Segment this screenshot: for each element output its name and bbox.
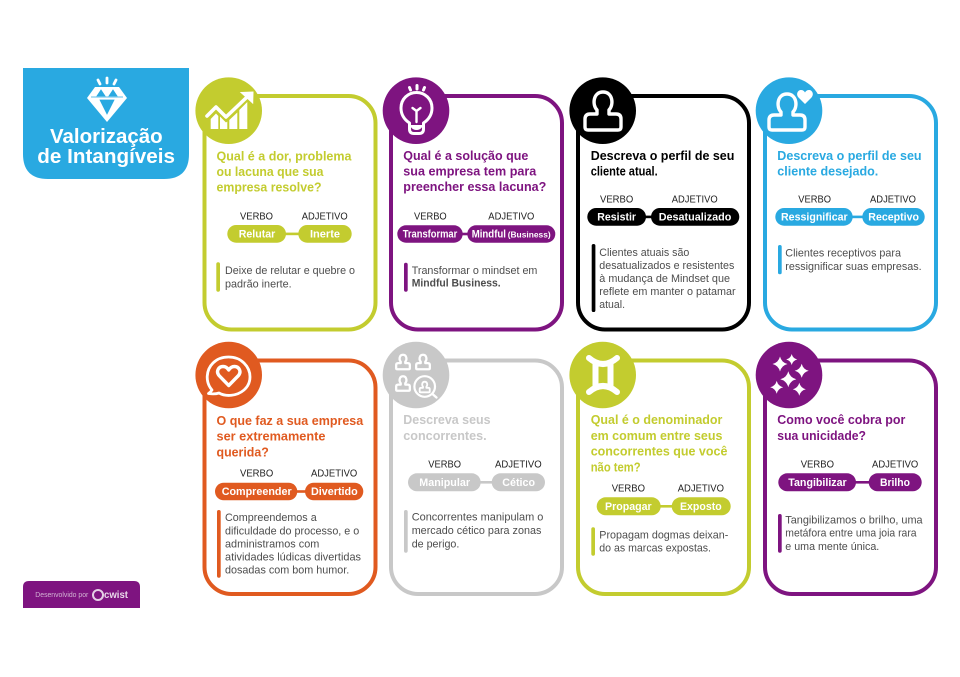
verb and adjective pills: Transformar — [403, 229, 458, 241]
description: do as marcas expostas. — [599, 543, 711, 555]
verb and adjective pills: VERBO — [801, 459, 834, 470]
heading: ser extremamente — [216, 429, 326, 444]
heading — [591, 148, 734, 178]
verb and adjective pills — [227, 211, 352, 243]
description: atual. — [599, 299, 625, 311]
verb and adjective pills: Exposto — [680, 501, 722, 513]
verb and adjective pills: ADJETIVO — [870, 194, 916, 205]
description: Mindful Business. — [412, 278, 501, 290]
verb and adjective pills: VERBO — [414, 211, 447, 222]
heading: Descreva seus — [403, 412, 491, 427]
heading: O que faz a sua empresa — [216, 413, 364, 428]
icon: heart in speech bubble — [207, 357, 250, 395]
verb and adjective pills: Cético — [502, 477, 535, 489]
verb and adjective pills: Mindful — [472, 229, 506, 241]
heading: querida? — [216, 445, 269, 460]
description — [404, 510, 543, 553]
verb and adjective pills: ADJETIVO — [672, 194, 718, 205]
heading: sua unicidade? — [777, 428, 866, 443]
heading: preencher essa lacuna? — [403, 179, 546, 194]
verb and adjective pills: VERBO — [798, 194, 831, 205]
icon: person with heart — [769, 90, 813, 130]
panel: footer credit — [23, 581, 140, 608]
heading: sua empresa tem para — [403, 164, 537, 178]
verb and adjective pills: ADJETIVO — [302, 211, 348, 222]
description: dificuldade do processo, e o — [225, 525, 359, 537]
icon: rising chart — [207, 92, 253, 129]
verb and adjective pills: Receptivo — [868, 211, 919, 223]
heading: concorrentes que você — [591, 444, 727, 459]
description: Clientes atuais são — [599, 247, 689, 259]
verb and adjective pills: ADJETIVO — [872, 459, 919, 470]
heading: ou lacuna que sua — [216, 164, 324, 179]
description: dosadas com bom humor. — [225, 565, 349, 577]
heading: cliente atual. — [591, 163, 658, 178]
verb and adjective pills: VERBO — [240, 469, 274, 480]
heading — [403, 412, 491, 443]
description — [778, 514, 923, 553]
verb and adjective pills: ADJETIVO — [488, 211, 534, 222]
description: metáfora entre uma joia rara — [785, 528, 917, 540]
heading: concorrentes. — [403, 428, 487, 443]
verb and adjective pills: Relutar — [239, 228, 276, 240]
panel: empresa querida — [195, 342, 376, 594]
description: de perigo. — [412, 538, 459, 550]
title: de Intangíveis — [37, 146, 175, 168]
description: Clientes receptivos para — [785, 248, 902, 260]
description: mercado cético para zonas — [412, 525, 542, 537]
description — [591, 527, 729, 556]
verb and adjective pills — [215, 469, 363, 500]
verb and adjective pills: Compreender — [222, 486, 292, 498]
panel: solução — [383, 77, 562, 330]
description — [404, 263, 537, 292]
panel: cliente atual — [569, 77, 749, 330]
description — [778, 245, 922, 274]
description: Concorrentes manipulam o — [412, 512, 543, 524]
verb and adjective pills: VERBO — [600, 194, 634, 205]
verb and adjective pills: Propagar — [605, 501, 652, 513]
icon: light bulb — [401, 86, 432, 134]
panel: footer credit: Desenvolvido por — [35, 590, 89, 599]
verb and adjective pills: VERBO — [428, 459, 461, 470]
icon: gemini symbol — [589, 358, 617, 392]
description — [216, 262, 355, 292]
heading: Qual é a solução que — [403, 148, 528, 163]
heading: não tem? — [591, 460, 641, 475]
description: Propagam dogmas deixan- — [599, 529, 729, 541]
panel: cliente desejado — [756, 77, 936, 330]
verb and adjective pills: (Business) — [508, 230, 551, 240]
description: Deixe de relutar e quebre o — [225, 265, 355, 277]
verb and adjective pills: VERBO — [612, 484, 645, 495]
verb and adjective pills: VERBO — [240, 211, 273, 222]
verb and adjective pills — [408, 459, 545, 491]
heading — [216, 149, 352, 194]
heading — [777, 412, 905, 443]
description: administramos com — [225, 538, 319, 550]
heading: Descreva o perfil de seu — [777, 148, 922, 163]
icon: person — [585, 92, 621, 130]
verb and adjective pills: Inerte — [310, 228, 340, 240]
verb and adjective pills: Brilho — [880, 477, 910, 489]
panel: denominador comum — [569, 342, 749, 594]
heading: Como você cobra por — [777, 412, 905, 427]
heading: Descreva o perfil de seu — [591, 148, 734, 163]
heading — [216, 413, 364, 460]
description: Compreendemos a — [225, 512, 318, 524]
verb and adjective pills: Resistir — [597, 211, 637, 223]
icon: diamond — [87, 78, 127, 122]
description: desatualizados e resistentes — [599, 260, 735, 272]
heading: Qual é o denominador — [591, 412, 722, 427]
verb and adjective pills — [597, 484, 731, 515]
heading — [591, 412, 727, 475]
description — [592, 244, 736, 312]
description: reflete em manter o patamar — [599, 286, 736, 298]
verb and adjective pills: ADJETIVO — [311, 469, 358, 480]
description: ressignificar suas empresas. — [785, 261, 922, 273]
description — [217, 510, 361, 578]
heading: empresa resolve? — [216, 179, 322, 194]
description: atividades lúdicas divertidas — [225, 551, 361, 563]
panel: title banner — [23, 68, 189, 179]
title — [37, 126, 175, 168]
verb and adjective pills — [587, 194, 739, 226]
panel: unicidade — [756, 342, 936, 594]
verb and adjective pills: Tangibilizar — [788, 477, 847, 489]
description: padrão inerte. — [225, 278, 292, 290]
description: e uma mente única. — [785, 541, 879, 553]
icon: competitors with magnifier — [396, 355, 436, 398]
heading — [777, 148, 922, 178]
heading: cliente desejado. — [777, 163, 878, 178]
title: Valorização — [50, 126, 163, 148]
panel: concorrentes — [383, 342, 562, 594]
panel: dor / problema — [195, 77, 376, 330]
verb and adjective pills: Desatualizado — [659, 211, 732, 223]
description: à mudança de Mindset que — [599, 273, 730, 285]
verb and adjective pills: ADJETIVO — [495, 459, 542, 470]
description: Tangibilizamos o brilho, uma — [785, 514, 923, 526]
verb and adjective pills: Manipular — [419, 477, 471, 489]
verb and adjective pills — [775, 194, 925, 226]
icon: sparkles — [770, 354, 809, 396]
heading: Qual é a dor, problema — [216, 149, 352, 164]
heading — [403, 148, 546, 194]
verb and adjective pills: ADJETIVO — [678, 484, 724, 495]
panel: footer credit: cwist — [104, 590, 129, 601]
verb and adjective pills: Divertido — [311, 486, 358, 498]
verb and adjective pills — [778, 459, 922, 491]
verb and adjective pills — [397, 211, 555, 243]
description: Transformar o mindset em — [412, 265, 537, 277]
verb and adjective pills: Ressignificar — [781, 211, 848, 223]
heading: em comum entre seus — [591, 428, 722, 443]
